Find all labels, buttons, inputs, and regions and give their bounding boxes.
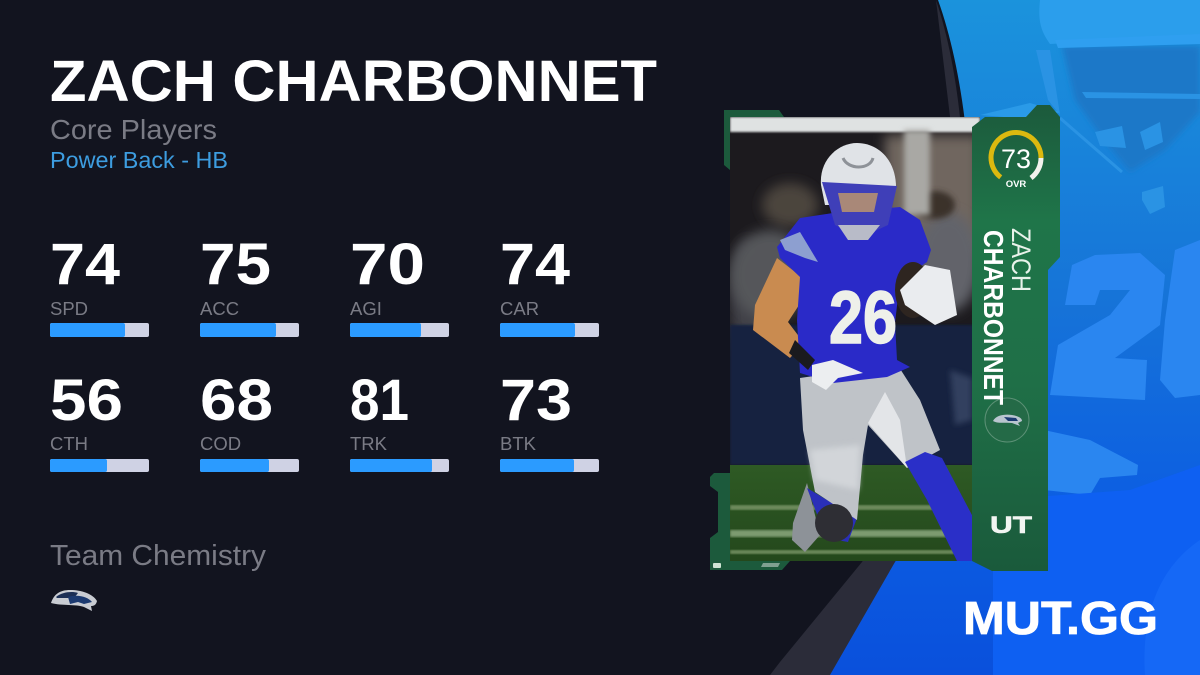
stat: SPD [50, 232, 149, 337]
curved stripe [770, 0, 964, 675]
card frame: top left bracket [724, 110, 784, 170]
card frame: bottom left marks [713, 563, 780, 568]
player: helmet [821, 143, 897, 240]
stat: CAR: CAR [500, 298, 539, 319]
stat: BTK: BTK [500, 433, 537, 454]
stat: COD [200, 368, 299, 472]
stat: AGI [350, 232, 449, 337]
player: upper glove [900, 265, 957, 325]
stat: BTK [500, 368, 599, 472]
stat: CAR: 74 [500, 232, 570, 297]
player: jersey number: 26 [829, 276, 897, 359]
title: ZACH CHARBONNET [50, 49, 657, 114]
brand logo: MUT.GG [963, 592, 1158, 644]
silhouette: face mask [1062, 46, 1200, 172]
player: arm [753, 258, 800, 358]
stat: AGI: 70 [350, 232, 425, 297]
stat: TRK [350, 368, 449, 472]
silhouette: lower body [993, 465, 1200, 675]
player: lower glove [812, 360, 863, 390]
subtitle: archetype: Power Back - HB [50, 147, 228, 173]
rating ring: 73 [1001, 144, 1031, 174]
stat: CTH [50, 368, 149, 472]
player: back leg shoe [792, 483, 820, 552]
player: ball [895, 262, 923, 318]
subtitle: program: Core Players [50, 114, 217, 145]
silhouette: jersey number [1050, 253, 1165, 400]
player: front leg sock [905, 452, 973, 561]
card last name: CHARBONNET [978, 230, 1009, 405]
stat: ACC: 75 [200, 232, 271, 297]
player: knee [815, 504, 853, 542]
card first name: ZACH [1006, 228, 1036, 292]
stat: BTK: 73 [500, 368, 572, 433]
stat: CTH: CTH [50, 433, 88, 454]
icon: team badge [985, 398, 1029, 442]
stat: SPD: 74 [50, 232, 120, 297]
stat: TRK: 81 [350, 368, 409, 433]
blue background panel with player silhouette [820, 0, 1200, 675]
photo background [730, 117, 980, 561]
team chemistry heading: Team Chemistry [50, 540, 267, 572]
stat: CAR [500, 232, 599, 337]
stat: SPD: SPD [50, 298, 88, 319]
card name panel [972, 105, 1060, 571]
stat: COD: 68 [200, 368, 273, 433]
silhouette: shoulder [981, 103, 1058, 117]
player: sleeve logo [780, 232, 818, 262]
silhouette: helmet [1039, 0, 1200, 44]
rating ring [991, 133, 1041, 190]
player: jersey [777, 207, 931, 383]
stat: COD: COD [200, 433, 241, 454]
player card [710, 105, 1060, 571]
card type label: UT [990, 512, 1032, 539]
stat: ACC [200, 232, 299, 337]
icon: Seahawks logo [51, 590, 97, 611]
stat: TRK: TRK [350, 433, 388, 454]
card frame: bottom left bracket [710, 473, 790, 570]
player: wristband [789, 340, 815, 370]
rating ring: OVR [1006, 179, 1026, 190]
player: back leg sock [807, 488, 857, 542]
stat: CTH: 56 [50, 368, 123, 433]
silhouette: hand [1044, 430, 1138, 495]
player: pants [800, 364, 940, 520]
stat: ACC: ACC [200, 298, 239, 319]
player photo [730, 117, 980, 561]
stat: AGI: AGI [350, 298, 382, 319]
